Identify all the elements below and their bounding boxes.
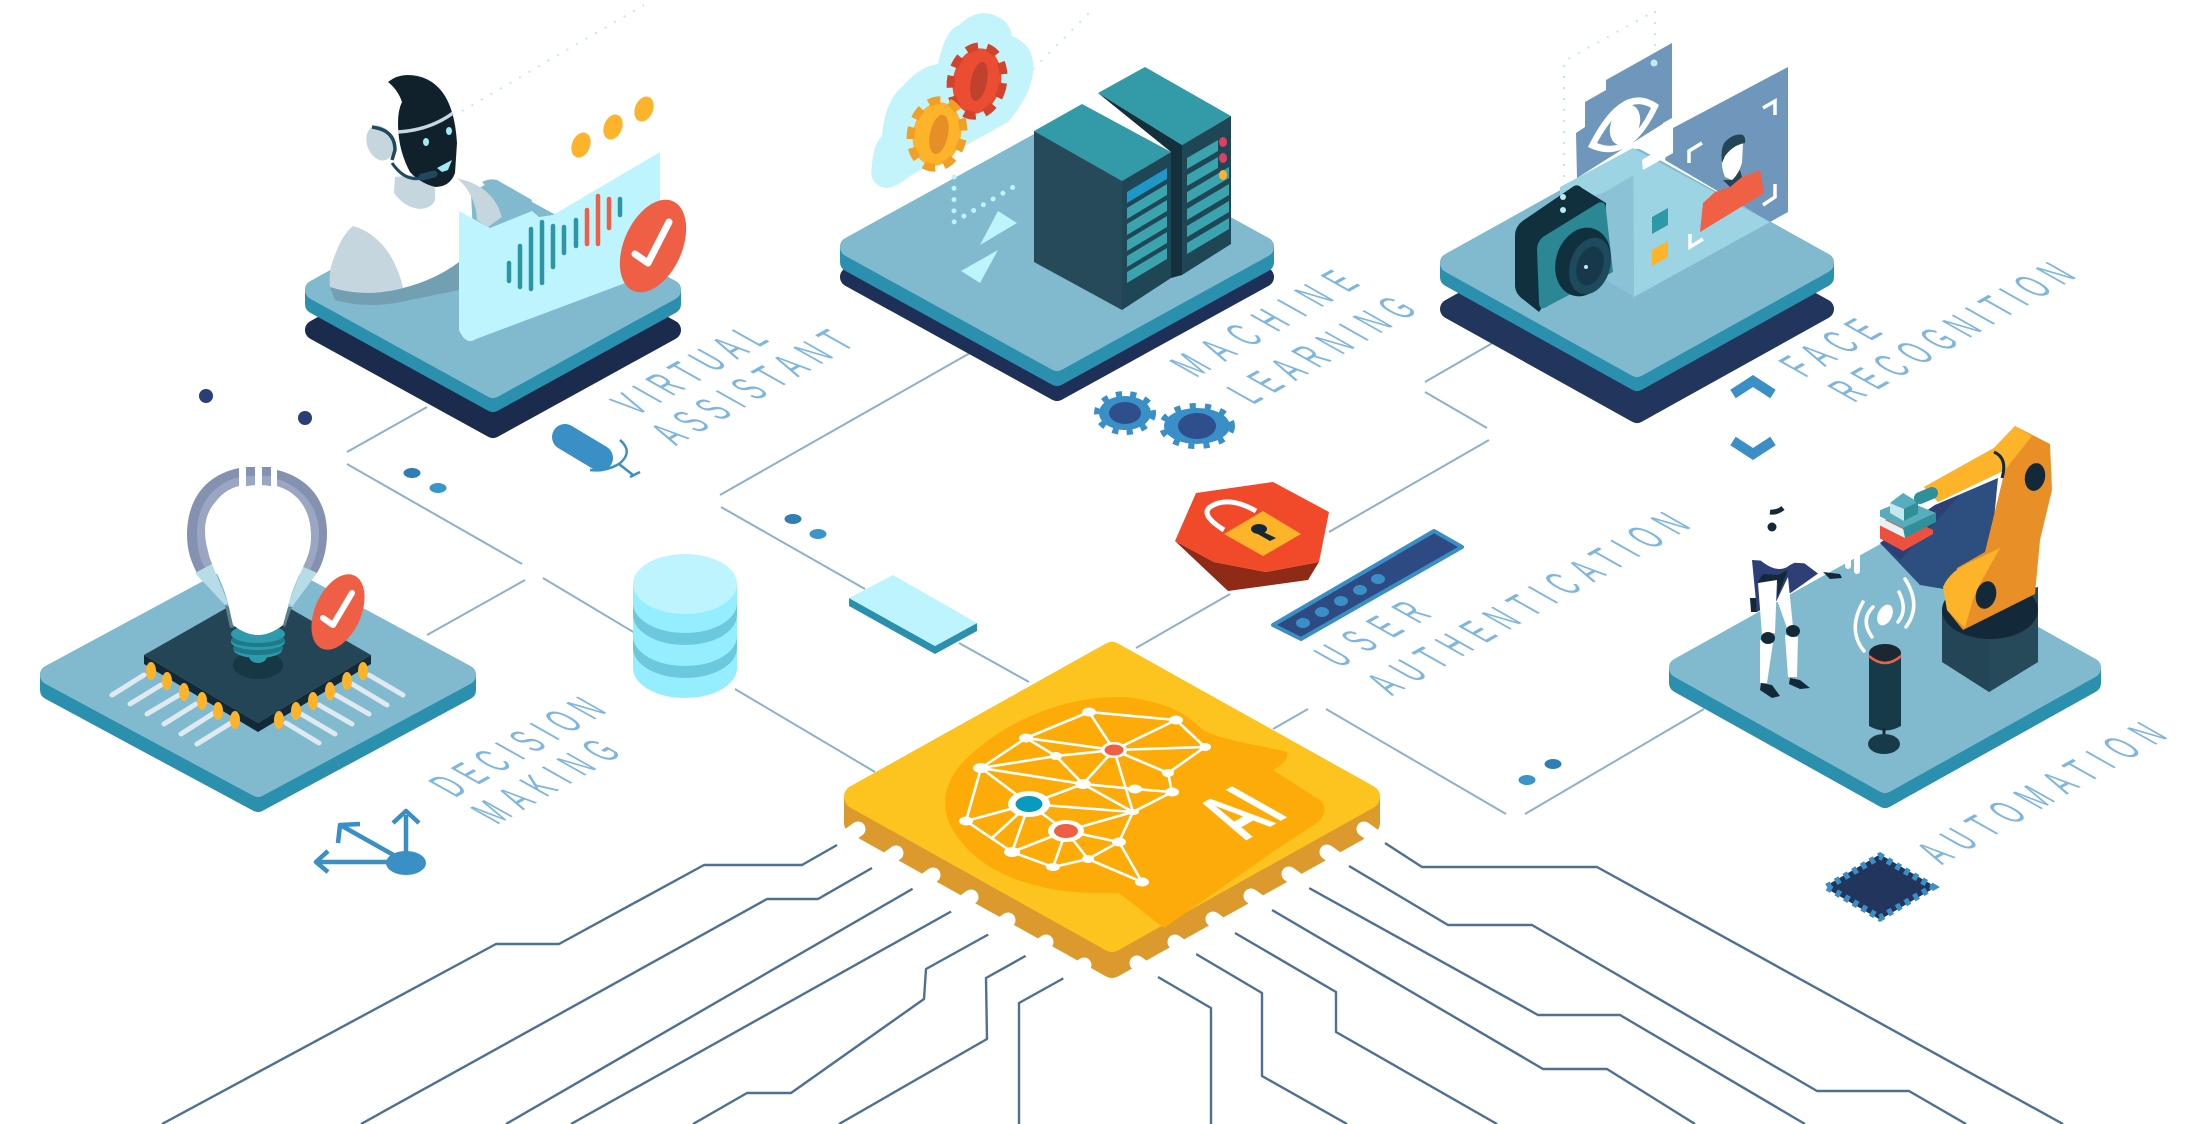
icon: small chip (1827, 856, 1933, 918)
chip label: AI (1174, 775, 1308, 851)
panel: face scan (1560, 67, 1788, 297)
chip with pins (112, 590, 403, 744)
icon: password bar (1273, 531, 1462, 639)
icon: check badge (301, 566, 375, 658)
platform: face recognition (1450, 159, 1824, 413)
panel: face recognition (1450, 43, 1824, 454)
chip pins (844, 829, 1378, 975)
dotted guide lines (462, 5, 1655, 210)
icon: chevrons (1733, 381, 1773, 454)
chip body (856, 654, 1368, 966)
panel: decision making (50, 389, 466, 875)
icon: axes (316, 811, 426, 875)
platform: automation (1679, 553, 2091, 798)
panel: machine learning (850, 13, 1264, 445)
chat screen with waveform (459, 152, 660, 341)
panel: eye scan (1576, 43, 1672, 178)
label: machine learning (1160, 264, 1429, 411)
label: virtual assistant: VIRTUAL (601, 321, 780, 422)
platform: virtual assistant (315, 192, 671, 428)
icon: check badge (607, 189, 699, 303)
neural network (959, 708, 1211, 886)
icon: three dots (568, 94, 657, 160)
panel: automation (1679, 426, 2091, 918)
icon: memory module (849, 575, 977, 654)
icon: lock shield (1175, 482, 1329, 591)
connector lines between platforms and AI chip (347, 326, 1704, 814)
icon: cloud with gears (871, 13, 1033, 188)
icon: microphone (565, 437, 640, 477)
label: decision making: DECISION (419, 691, 618, 804)
icon: small gears (1098, 395, 1231, 445)
panel: virtual assistant (315, 75, 699, 428)
platform: decision making (50, 563, 466, 802)
label: user authentication: USER (1304, 595, 1443, 674)
icon: camera (1515, 185, 1619, 312)
icon: light bulb (187, 467, 327, 679)
robot figure (1738, 500, 1880, 698)
gripper tool (1868, 493, 1936, 551)
circuit traces (162, 843, 2063, 1124)
AI chip (844, 654, 1378, 975)
smart speaker with sound waves (1855, 579, 1914, 754)
dotted marker and triangles (954, 177, 1022, 283)
server racks (1034, 67, 1231, 310)
label: decision making: MAKING (461, 733, 633, 831)
label: machine learning: MACHINE (1160, 264, 1371, 384)
decorative navy dots (199, 389, 312, 425)
robotic arm (1880, 426, 2052, 692)
platform: machine learning (850, 133, 1264, 391)
orange head shape (945, 697, 1325, 928)
label: virtual assistant: ASSISTANT (640, 324, 866, 452)
assistant figure (330, 75, 532, 305)
label: user authentication: AUTHENTICATION (1356, 506, 1702, 702)
icon: database (633, 554, 737, 698)
label: face recognition: FACE (1769, 313, 1894, 384)
connector dots (404, 468, 1562, 785)
label: face recognition: RECOGNITION (1818, 257, 2088, 409)
label: machine learning: LEARNING (1217, 291, 1429, 411)
label: automation: AUTOMATION (1906, 717, 2179, 871)
